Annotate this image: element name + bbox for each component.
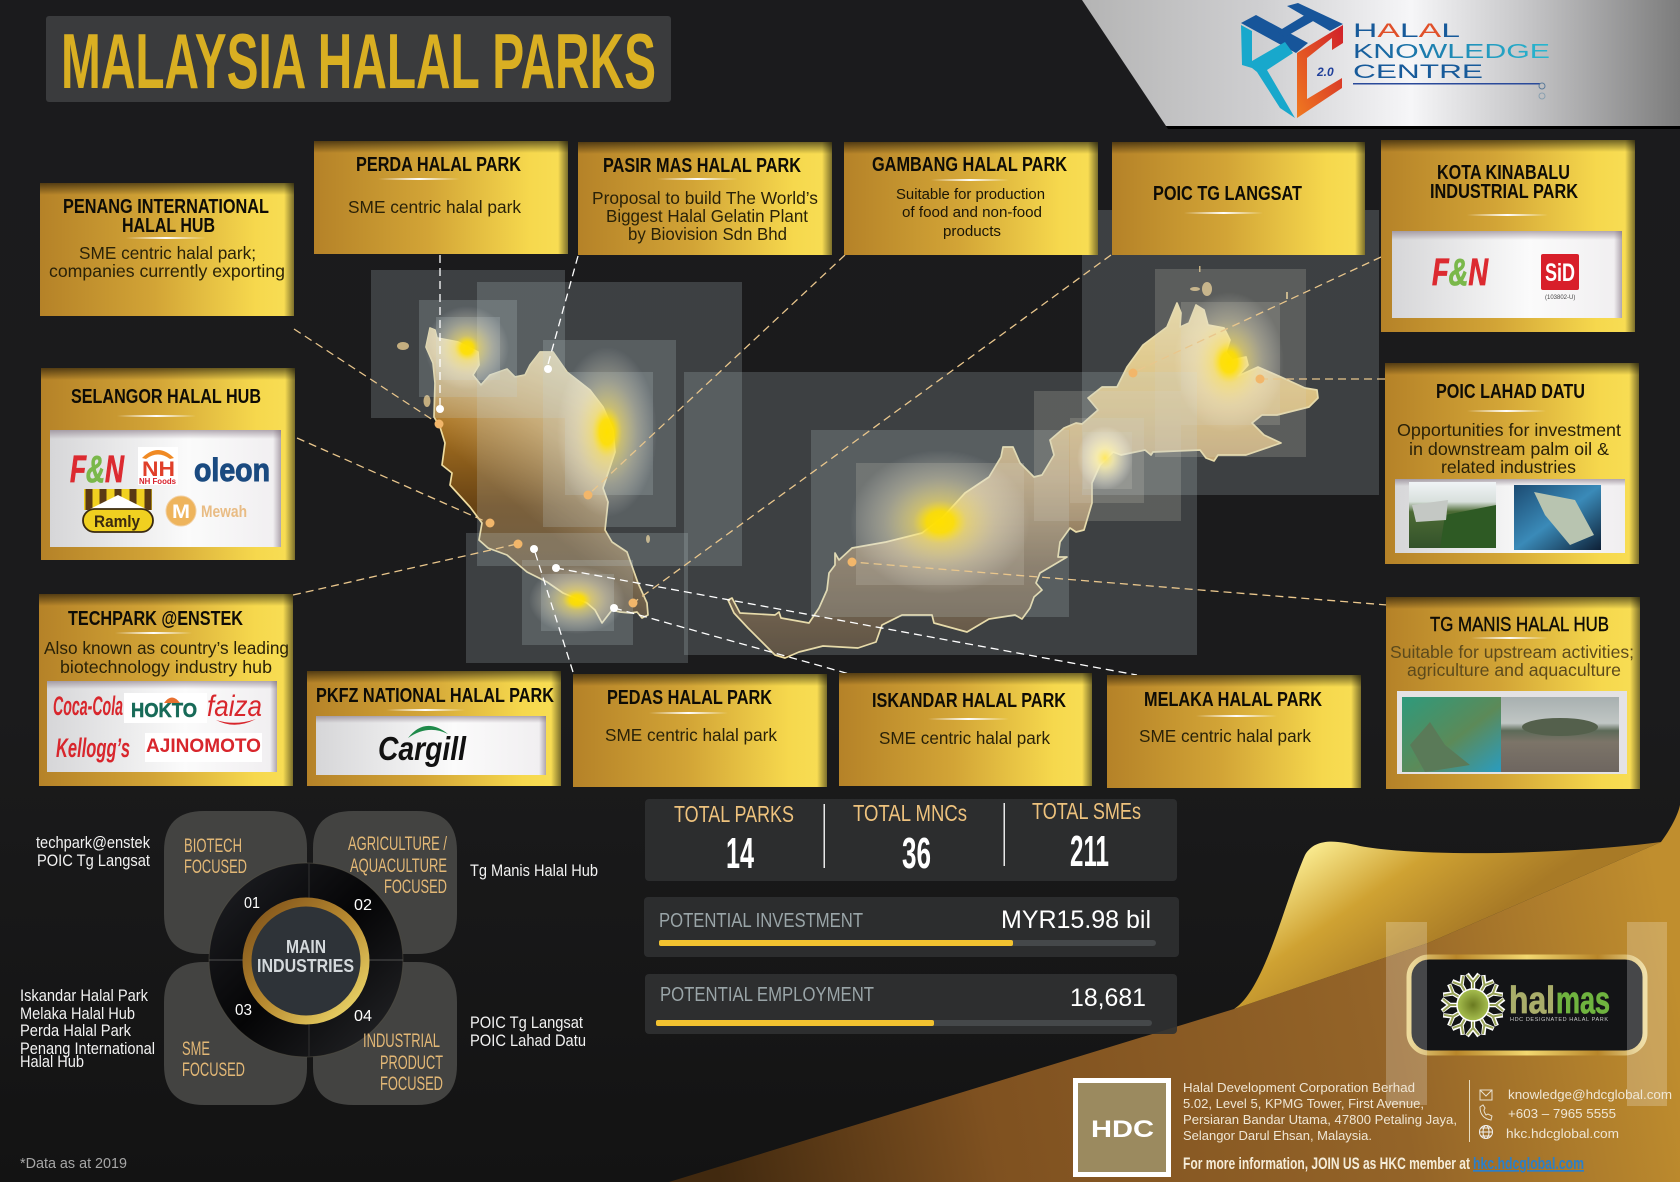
panel: potential employment: POTENTIAL EMPLOYMENT (660, 984, 874, 1006)
panel: Penang International Halal Hub: HALAL HUB (122, 215, 215, 237)
industry park lists: Melaka Halal Hub (20, 1004, 135, 1023)
logos: F&N and SiD: (103802-U) (1545, 295, 1575, 301)
logos: F&N, NH Foods, oleon, Ramly, Mewah: Mewah (201, 502, 247, 521)
logos: F&N, NH Foods, oleon, Ramly, Mewah (50, 430, 281, 547)
join call to action: For more information, JOIN US as HKC member at (1183, 1154, 1470, 1173)
logos: F&N, NH Foods, oleon, Ramly, Mewah: NH Foods (139, 477, 177, 486)
address: Halal Development Corporation Berhad (1183, 1081, 1415, 1095)
logo wordmark: H A L A L (1353, 21, 1460, 42)
panel: Perda Halal Park (314, 141, 568, 254)
logos: Coca-Cola, Hokto, Faiza, Kellogg's, Ajinomoto: AJINOMOTO (146, 736, 261, 757)
centre label: MAIN (286, 937, 326, 957)
halmas wordmark (1509, 980, 1610, 1023)
panel: Penang International Halal Hub (40, 183, 294, 316)
panel: Penang International Halal Hub: companies currently exporting (49, 261, 285, 281)
panel: totals: 36 (902, 829, 931, 878)
panel: potential employment: 18,681 (1070, 984, 1146, 1012)
industry park lists: Tg Manis Halal Hub (470, 861, 598, 880)
panel: Penang International Halal Hub: SME centric halal park; (79, 243, 256, 263)
contact details: hkc.hdcglobal.com (1506, 1126, 1619, 1141)
panel: potential investment (644, 897, 1179, 957)
quadrant numbers: 01 (244, 895, 260, 912)
panel: Iskandar Halal Park (839, 673, 1092, 786)
industry park lists: Iskandar Halal Park (20, 986, 148, 1005)
logo wordmark (1353, 21, 1550, 99)
contact details: +603 – 7965 5555 (1508, 1106, 1616, 1121)
panel: totals: TOTAL PARKS (674, 801, 794, 827)
quadrant labels: FOCUSED (184, 857, 247, 878)
panel: Techpark @Enstek: Also known as country’s leading (44, 638, 289, 658)
industry park lists: Halal Hub (20, 1052, 84, 1071)
logos: Coca-Cola, Hokto, Faiza, Kellogg's, Ajinomoto: HOKTO (131, 700, 197, 722)
logos: F&N and SiD: F&N (1432, 252, 1489, 294)
quadrant numbers: 03 (235, 1002, 252, 1019)
leader lines (293, 255, 1387, 675)
logos: F&N, NH Foods, oleon, Ramly, Mewah: oleon (194, 452, 270, 488)
panel: Tg Manis Halal Hub (1386, 597, 1640, 789)
logos: Coca-Cola, Hokto, Faiza, Kellogg's, Ajinomoto: faiza (207, 690, 262, 723)
industry park lists: POIC Tg Langsat (37, 851, 150, 870)
translucent highlight tiles (371, 210, 1379, 663)
panel: Kota Kinabalu Industrial Park: KOTA KINABALU (1437, 162, 1570, 184)
panel: Kota Kinabalu Industrial Park: INDUSTRIAL PARK (1430, 181, 1578, 203)
silver header band with HKC logo (1082, 0, 1680, 129)
panel: POIC Lahad Datu: POIC LAHAD DATU (1436, 381, 1585, 403)
industry park lists: POIC Tg Langsat (470, 1013, 583, 1032)
panel: Selangor Halal Hub (41, 368, 295, 560)
address: Selangor Darul Ehsan, Malaysia. (1183, 1129, 1372, 1143)
logos: F&N and SiD (1392, 231, 1622, 318)
halmas wordmark: hal (1509, 980, 1555, 1022)
address: 5.02, Level 5, KPMG Tower, First Avenue, (1183, 1097, 1424, 1111)
gold corner wave (669, 805, 1680, 1182)
icon: phone (1480, 1105, 1492, 1120)
quadrant labels: FOCUSED (380, 1074, 443, 1095)
quadrant labels: BIOTECH (184, 836, 242, 857)
quadrant numbers: 04 (354, 1008, 372, 1025)
panel: Perda Halal Park: PERDA HALAL PARK (356, 154, 521, 176)
centre label: INDUSTRIES (257, 956, 354, 976)
main industries diagram (164, 811, 457, 1105)
industry park lists: techpark@enstek (36, 833, 150, 852)
panel: Techpark @Enstek (39, 594, 293, 786)
location dots (434, 365, 1264, 612)
logos: F&N, NH Foods, oleon, Ramly, Mewah: NH (142, 458, 175, 481)
quadrant labels: INDUSTRIAL (363, 1031, 440, 1052)
industry park lists: POIC Lahad Datu (470, 1031, 586, 1050)
panel: Iskandar Halal Park: SME centric halal park (879, 728, 1050, 748)
panel: Gambang Halal Park (844, 142, 1098, 255)
industry park lists: Penang International (20, 1039, 155, 1058)
panel: potential investment: MYR15.98 bil (1001, 906, 1151, 934)
address: Persiaran Bandar Utama, 47800 Petaling Jaya, (1183, 1113, 1457, 1127)
panel: Gambang Halal Park: Suitable for production (896, 186, 1045, 203)
panel: POIC Tg Langsat (1112, 142, 1365, 255)
quadrant tiles (164, 811, 457, 1105)
quadrant labels: SME (182, 1039, 210, 1060)
panel: Tg Manis Halal Hub: agriculture and aquaculture (1407, 660, 1621, 680)
panel: totals: TOTAL MNCs (853, 800, 967, 826)
panel: Pasir Mas Halal Park: PASIR MAS HALAL PARK (603, 155, 801, 177)
quadrant numbers: 02 (354, 897, 372, 914)
panel: Tg Manis Halal Hub: Suitable for upstream activities; (1390, 642, 1634, 662)
quadrant labels: FOCUSED (384, 877, 447, 898)
panel: Pasir Mas Halal Park: Proposal to build The World’s (592, 188, 818, 208)
peninsular Malaysia (426, 328, 648, 623)
halmas wordmark: HDC DESIGNATED HALAL PARK (1510, 1017, 1608, 1023)
quadrant numbers (235, 895, 372, 1025)
logo: Cargill (316, 716, 546, 775)
panel: totals: 14 (726, 829, 754, 878)
logo wordmark: KNOWLEDGE (1353, 41, 1550, 63)
halmas badge (1409, 957, 1645, 1053)
translucent footer bars (1386, 922, 1667, 1106)
panel: Gambang Halal Park: products (943, 223, 1001, 240)
logos: F&N, NH Foods, oleon, Ramly, Mewah: M (172, 502, 190, 523)
logos: Coca-Cola, Hokto, Faiza, Kellogg's, Ajinomoto: Coca-Cola (53, 691, 123, 721)
logos: F&N and SiD: SiD (1545, 259, 1575, 287)
panel: Melaka Halal Park (1107, 675, 1361, 788)
panel: Pasir Mas Halal Park: by Biovision Sdn Bhd (628, 224, 787, 244)
address (1183, 1081, 1457, 1143)
join call to action: hkc.hdcglobal.com (1473, 1154, 1584, 1173)
centre label (257, 937, 354, 976)
logos: F&N, NH Foods, oleon, Ramly, Mewah: F&N (70, 449, 125, 491)
panel: Gambang Halal Park: GAMBANG HALAL PARK (872, 154, 1067, 176)
panel: Pedas Halal Park (573, 674, 827, 787)
panel: totals: TOTAL SMEs (1032, 798, 1141, 824)
HDC logo (1073, 1078, 1171, 1177)
map of Malaysia (371, 210, 1379, 663)
panel: Iskandar Halal Park: ISKANDAR HALAL PARK (872, 690, 1066, 712)
panel: Techpark @Enstek: TECHPARK @ENSTEK (68, 608, 243, 630)
panel: Gambang Halal Park: of food and non-food (902, 204, 1042, 221)
quadrant labels: FOCUSED (182, 1060, 245, 1081)
panel: Melaka Halal Park: SME centric halal park (1139, 726, 1311, 746)
title: MALAYSIA HALAL PARKS (61, 17, 656, 105)
panel: totals (645, 798, 1177, 881)
panel: Pedas Halal Park: PEDAS HALAL PARK (607, 687, 772, 709)
panel: Techpark @Enstek: biotechnology industry hub (60, 657, 272, 677)
panel: POIC Lahad Datu (1385, 363, 1639, 564)
quadrant labels: AGRICULTURE / (348, 834, 447, 855)
logos: F&N, NH Foods, oleon, Ramly, Mewah: Ramly (94, 512, 140, 531)
panel: Penang International Halal Hub: PENANG INTERNATIONAL (63, 196, 269, 218)
industry park lists: Perda Halal Park (20, 1021, 131, 1040)
panel: Melaka Halal Park: MELAKA HALAL PARK (1144, 689, 1322, 711)
panel: POIC Tg Langsat: POIC TG LANGSAT (1153, 183, 1302, 205)
panel: Kota Kinabalu Industrial Park (1381, 140, 1635, 332)
halmas wordmark: mas (1556, 980, 1610, 1022)
panel: POIC Lahad Datu: related industries (1441, 457, 1576, 477)
panel: totals: 211 (1070, 827, 1109, 876)
title (46, 16, 671, 105)
quadrant labels (182, 834, 447, 1095)
contact details (1469, 1080, 1672, 1142)
logo wordmark: CENTRE (1353, 62, 1483, 83)
panel: POIC Lahad Datu: in downstream palm oil & (1409, 439, 1609, 459)
contact details: knowledge@hdcglobal.com (1508, 1087, 1672, 1102)
panel: Pedas Halal Park: SME centric halal park (605, 725, 777, 745)
logos: Coca-Cola, Hokto, Faiza, Kellogg's, Ajinomoto: Kellogg’s (56, 733, 130, 763)
photos: palm oil port (1395, 479, 1625, 553)
quadrant labels: PRODUCT (380, 1053, 443, 1074)
photos: Tg Manis site (1397, 691, 1627, 774)
logo: Cargill: Cargill (378, 730, 467, 767)
central dial (209, 863, 403, 1057)
quadrant labels: AQUACULTURE (350, 856, 447, 877)
panel: potential employment (645, 974, 1177, 1034)
yellow hotspot glows (425, 292, 1284, 634)
panel: Perda Halal Park: SME centric halal park (348, 197, 521, 217)
panel: Tg Manis Halal Hub: TG MANIS HALAL HUB (1430, 614, 1609, 636)
panel: PKFZ National Halal Park (307, 671, 561, 786)
footnote: *Data as at 2019 (20, 1155, 127, 1172)
panel: POIC Lahad Datu: Opportunities for investment (1397, 420, 1621, 440)
icon: HKC cube logo: 2.0 (1316, 65, 1334, 79)
industry park lists (20, 833, 598, 1071)
panel: Pasir Mas Halal Park (578, 142, 832, 255)
panel: PKFZ National Halal Park: PKFZ NATIONAL HALAL PARK (316, 685, 554, 707)
icon: halmas star (1442, 974, 1504, 1036)
icon: HKC cube logo (1241, 3, 1343, 118)
panel: Pasir Mas Halal Park: Biggest Halal Gelatin Plant (606, 206, 808, 226)
Borneo: Sarawak and Sabah (728, 303, 1318, 658)
HDC logo: HDC (1091, 1116, 1154, 1143)
panel: Selangor Halal Hub: SELANGOR HALAL HUB (71, 386, 261, 408)
icon: globe (1480, 1126, 1492, 1138)
islands (397, 266, 1288, 543)
logos: Coca-Cola, Hokto, Faiza, Kellogg's, Ajinomoto (47, 681, 277, 772)
icon: email (1480, 1090, 1492, 1100)
panel: potential investment: POTENTIAL INVESTMENT (659, 910, 863, 932)
